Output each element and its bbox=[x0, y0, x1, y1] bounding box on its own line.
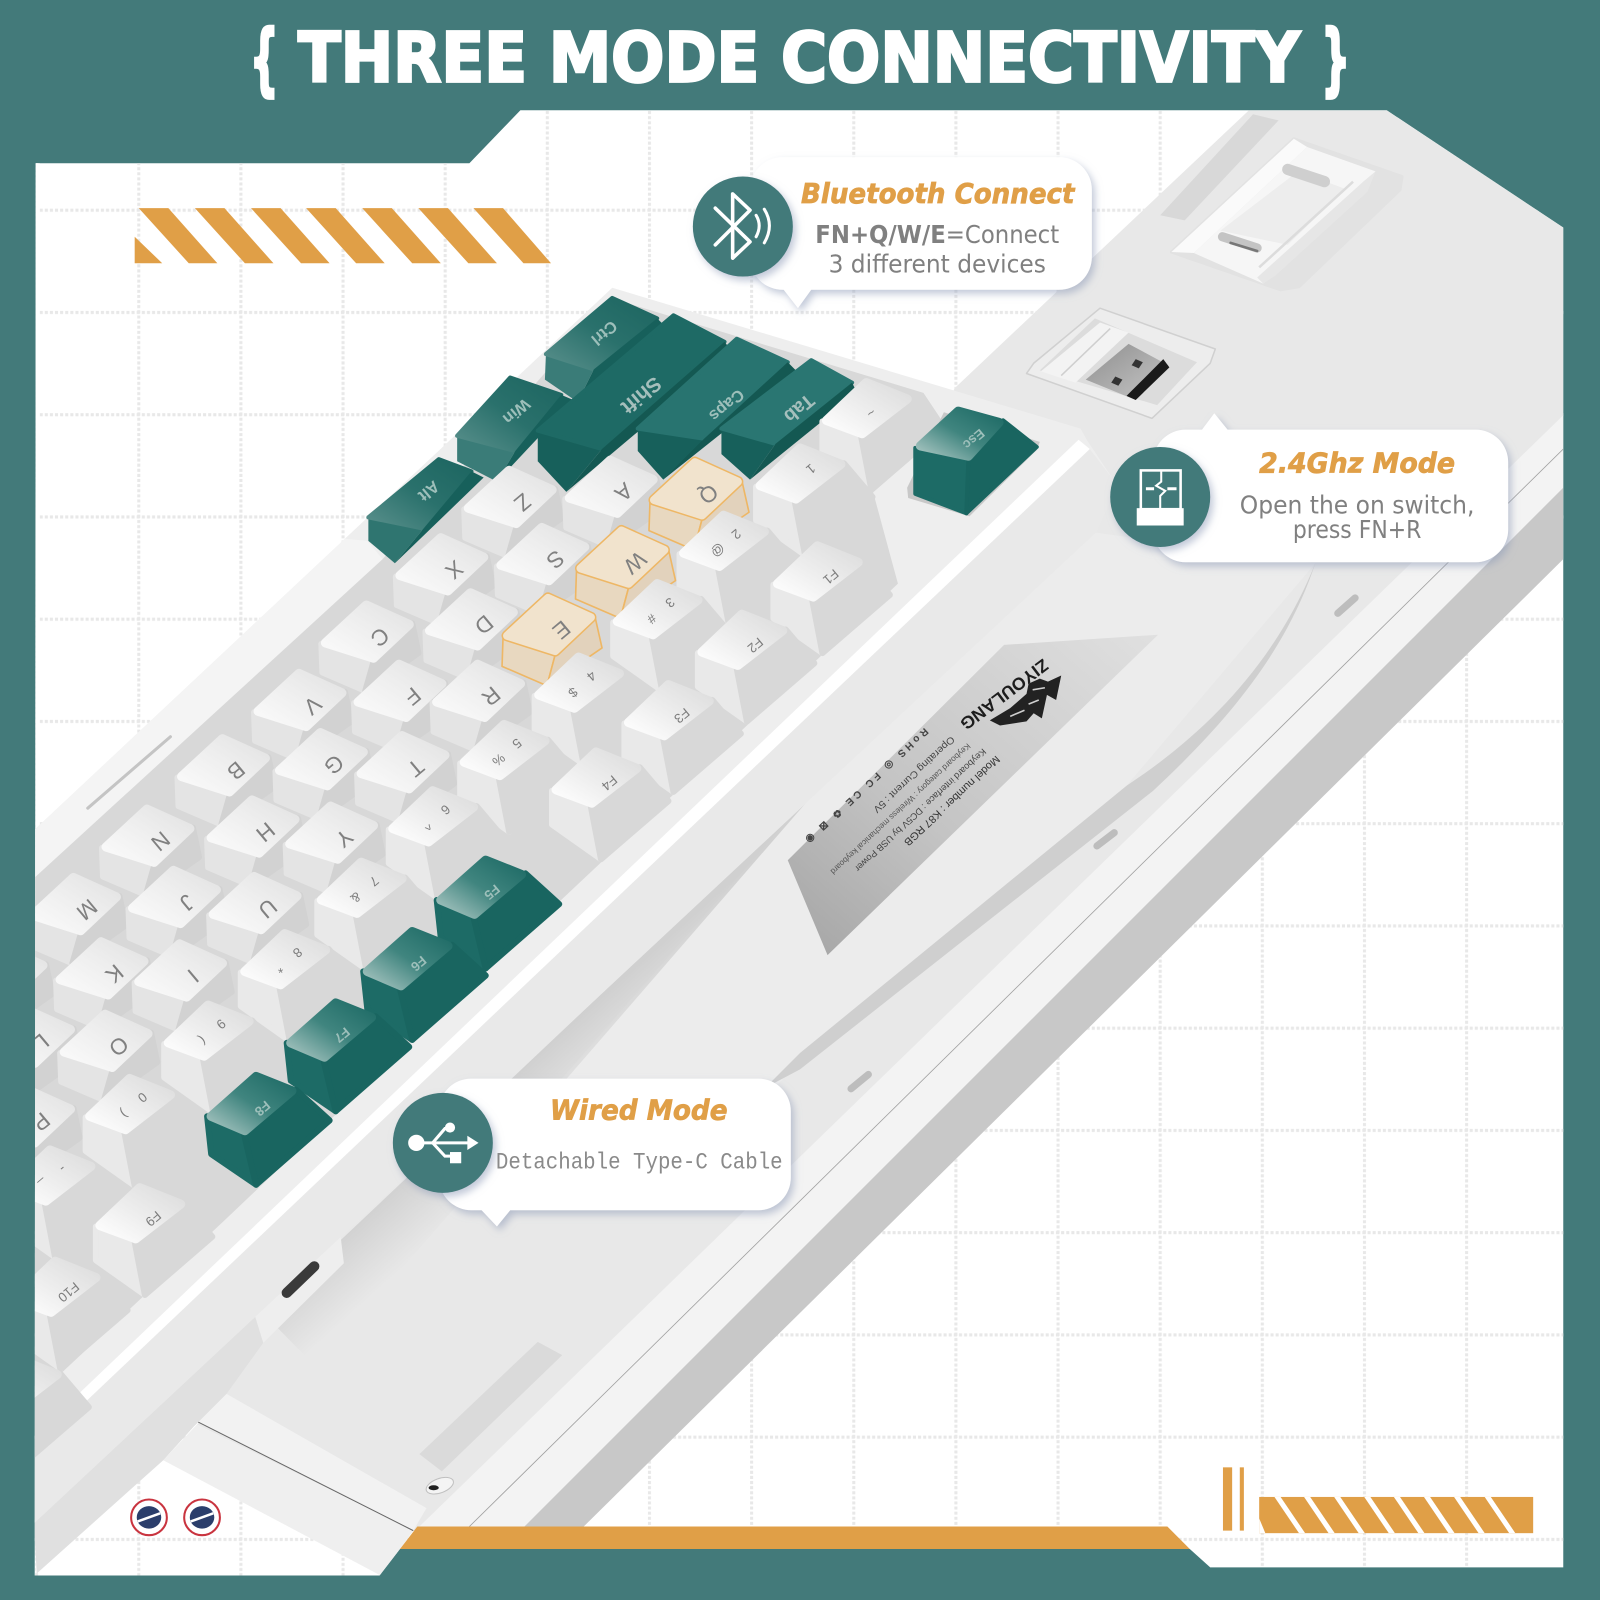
label sticker: Keyboard category : Wireless mechanical keyboard bbox=[828, 741, 972, 876]
bottom-right orange bars bbox=[1223, 1467, 1244, 1531]
keycap: 2: 2 bbox=[729, 526, 744, 542]
keycap: C bbox=[321, 605, 418, 691]
icon: usb dongle bbox=[1110, 447, 1210, 547]
keycap: H: H bbox=[251, 817, 280, 847]
keycap: U: U bbox=[253, 894, 282, 923]
keycap: minus: - bbox=[56, 1162, 69, 1176]
type-C switch bbox=[287, 1266, 314, 1293]
body text: FN+Q/W/E=Connect bbox=[815, 220, 1060, 249]
case side bbox=[34, 1317, 256, 1573]
keycap: E highlighted: E bbox=[548, 615, 575, 644]
keycap: K bbox=[56, 942, 153, 1028]
keycap: C: C bbox=[366, 622, 394, 652]
keycap: A bbox=[565, 460, 662, 546]
keycap: A: A bbox=[610, 478, 637, 507]
sticker spec lines: Model number : K87 RGB bbox=[901, 753, 1002, 848]
keycap: F10 bbox=[11, 1261, 128, 1368]
callout: Wired Mode bbox=[393, 1079, 791, 1227]
keycap: D bbox=[426, 593, 522, 679]
keycap: 1 bbox=[756, 448, 872, 555]
keycap: minus: _ bbox=[36, 1176, 53, 1194]
keycap: Win bbox=[457, 378, 573, 482]
keycap: F3: F3 bbox=[671, 705, 693, 726]
keycap: 8 bbox=[241, 934, 357, 1041]
keycap: Alt: Alt bbox=[414, 477, 443, 505]
keycap: 0 bbox=[86, 1079, 202, 1186]
keycap: F1: F1 bbox=[820, 566, 842, 588]
keycap: F3 bbox=[624, 685, 741, 792]
keycap: 6: 6 bbox=[438, 802, 453, 818]
keycap: 2 bbox=[680, 515, 796, 622]
keycap: J: J bbox=[175, 889, 199, 915]
keycap: Esc: Esc bbox=[960, 426, 988, 452]
heading: Wired Mode bbox=[550, 1094, 728, 1126]
keycap: Z bbox=[464, 470, 561, 556]
keycap: X bbox=[396, 538, 493, 623]
port notch bbox=[255, 1230, 344, 1343]
icon: bluetooth bbox=[693, 177, 793, 277]
keycap: 5: % bbox=[489, 750, 508, 769]
keycap: 6: ^ bbox=[419, 818, 434, 834]
callout: Bluetooth Connect bbox=[693, 157, 1092, 308]
keycap: H bbox=[207, 800, 304, 886]
body text: Detachable Type-C Cable bbox=[496, 1149, 783, 1176]
rubber strip bottom bbox=[419, 1342, 562, 1471]
label sticker bbox=[788, 635, 1158, 955]
keycap: F bbox=[354, 664, 451, 750]
keycap: B bbox=[178, 739, 274, 824]
keycap: W highlighted bbox=[576, 531, 676, 618]
keycap: D: D bbox=[470, 610, 498, 640]
keycap: 8: 8 bbox=[290, 944, 305, 961]
keycap: 7: & bbox=[347, 889, 364, 906]
title: } bbox=[1321, 15, 1350, 105]
callout: 2.4Ghz Mode bbox=[1110, 413, 1508, 562]
keycap: Win: Win bbox=[499, 395, 533, 428]
keycap: F11 bbox=[0, 1358, 89, 1465]
keycap: 9 bbox=[164, 1005, 281, 1112]
Esc recess bbox=[907, 412, 1040, 516]
label sticker: Keyboard interface : DC5V by USB Power bbox=[853, 746, 988, 874]
keycap: Shift bbox=[538, 315, 733, 492]
keycap: I: I bbox=[183, 964, 204, 987]
keycap: G: G bbox=[319, 749, 349, 780]
keycap: Caps bbox=[638, 339, 798, 480]
bubble bbox=[1153, 413, 1508, 562]
keycap: U bbox=[209, 877, 306, 962]
keycap: Shift: Shift bbox=[616, 372, 665, 418]
keycap: W highlighted: W bbox=[618, 546, 651, 579]
keycap: M bbox=[29, 878, 126, 963]
keycap: F6: F6 bbox=[408, 953, 429, 974]
keycap: B: B bbox=[222, 756, 250, 785]
keycap: Esc bbox=[915, 411, 1037, 513]
keycap: T bbox=[357, 736, 454, 821]
keycap: L bbox=[0, 1010, 80, 1096]
keycap: I bbox=[135, 944, 232, 1030]
keycap: F10: F10 bbox=[55, 1279, 82, 1305]
keycap: Caps: Caps bbox=[705, 385, 748, 425]
keycap: F8: F8 bbox=[252, 1098, 273, 1119]
keycap: F4 bbox=[552, 752, 668, 859]
keycap: O bbox=[60, 1014, 157, 1100]
keycap: minus bbox=[6, 1150, 122, 1257]
keycap: 7 bbox=[317, 862, 434, 969]
keycap: N: N bbox=[146, 826, 175, 856]
keycap: M: M bbox=[72, 894, 102, 925]
keycap: 4 bbox=[535, 657, 651, 764]
rubber strip top bbox=[1160, 114, 1279, 220]
top-left orange hazard stripes bbox=[135, 208, 551, 263]
keycap: F: F bbox=[399, 682, 426, 710]
body text: Open the on switch, bbox=[1240, 490, 1474, 519]
keycap: 4: $ bbox=[565, 684, 581, 701]
keycap: tilde bbox=[822, 383, 939, 490]
keycap: 9: ( bbox=[196, 1033, 209, 1048]
keycap: P bbox=[0, 1090, 80, 1176]
keycap: Ctrl bbox=[545, 298, 665, 402]
callout: 2.4Ghz Mode: press FN+R bbox=[1293, 515, 1421, 544]
keycap: 3 bbox=[613, 584, 730, 691]
keycap: 0: ) bbox=[118, 1107, 131, 1121]
keycap: F8 bbox=[207, 1077, 330, 1185]
keycap: 7: 7 bbox=[366, 873, 382, 889]
bottom-right hazard stripe bar bbox=[1259, 1497, 1533, 1533]
keycap: Y: Y bbox=[330, 824, 358, 852]
keycap: R: R bbox=[477, 681, 505, 711]
keycap: P: P bbox=[27, 1107, 55, 1136]
keycap: F7: F7 bbox=[331, 1024, 353, 1046]
keycap: R bbox=[433, 664, 530, 750]
callout: Bluetooth Connect: 3 different devices bbox=[829, 249, 1046, 278]
heading: 2.4Ghz Mode bbox=[1259, 447, 1455, 479]
keycap: 4: 4 bbox=[584, 668, 599, 684]
keycap: 5: 5 bbox=[509, 735, 525, 752]
key well bbox=[35, 298, 944, 1398]
keycap: F9 bbox=[96, 1188, 212, 1295]
keycap: L: L bbox=[28, 1029, 54, 1056]
icon: usb bbox=[393, 1093, 493, 1193]
keycap: 3: # bbox=[644, 611, 659, 627]
keycap: F1 bbox=[773, 546, 890, 653]
bubble bbox=[750, 157, 1092, 308]
keyboard case bbox=[34, 288, 1113, 1523]
sticker brand: ZIYOULANG bbox=[957, 655, 1052, 734]
keycap: K: K bbox=[101, 959, 128, 988]
keycap: F5: F5 bbox=[481, 881, 503, 903]
keycap: F9: F9 bbox=[143, 1208, 164, 1229]
keycap: 6 bbox=[389, 791, 505, 898]
keycap: Z: Z bbox=[509, 488, 536, 516]
keycap: Y bbox=[286, 806, 383, 892]
bubble bbox=[439, 1079, 791, 1227]
keycap: Q highlighted: Q bbox=[694, 479, 723, 509]
keycap: T: T bbox=[402, 754, 429, 782]
title: THREE MODE CONNECTIVITY bbox=[298, 20, 1301, 99]
keycap: N bbox=[102, 809, 199, 895]
tilt foot bbox=[1172, 139, 1375, 283]
keycap: V: V bbox=[299, 691, 326, 720]
title: { bbox=[250, 15, 279, 105]
keycap: V bbox=[254, 673, 351, 759]
wolf logo bbox=[990, 676, 1061, 726]
keycap: 3: 3 bbox=[662, 594, 678, 611]
bottom orange bar bbox=[400, 1527, 1190, 1549]
keycap: tilde: ~ bbox=[863, 405, 879, 421]
keycap: comma bbox=[35, 957, 48, 1006]
label sticker: Operating Current : 5V bbox=[870, 734, 956, 815]
USB receiver slot bbox=[1027, 308, 1215, 418]
keycap: Tab bbox=[721, 360, 857, 480]
icon: round marks bbox=[131, 1499, 220, 1535]
keycap: Tab: Tab bbox=[779, 389, 819, 427]
keycap: J bbox=[129, 870, 226, 956]
keycap: 1: 1 bbox=[803, 461, 818, 477]
keycap: S: S bbox=[542, 545, 569, 574]
keycap: F2 bbox=[698, 614, 814, 721]
keycap: equals bbox=[0, 1219, 48, 1327]
screw hole bbox=[426, 1476, 454, 1494]
certification marks: RoHS ◎ FC CE ♻ ⊠ ◉ bbox=[803, 725, 930, 845]
keycap: 8: * bbox=[272, 962, 286, 976]
keycap: 2: @ bbox=[708, 540, 728, 561]
keycap: G bbox=[276, 733, 372, 818]
keycap: F7 bbox=[287, 1003, 409, 1111]
keycap: F5 bbox=[437, 860, 559, 968]
keycap: 9: 9 bbox=[213, 1016, 229, 1032]
keycap: 5 bbox=[460, 724, 577, 832]
keycap: S bbox=[497, 528, 594, 613]
keycap: O: O bbox=[104, 1031, 133, 1061]
keycap: Ctrl: Ctrl bbox=[587, 317, 621, 348]
keycap: E highlighted bbox=[502, 598, 602, 686]
keycap: F4: F4 bbox=[599, 772, 620, 794]
feet pills bbox=[851, 598, 1355, 1089]
keycap: Q highlighted bbox=[649, 462, 749, 550]
keycap: F6 bbox=[363, 932, 486, 1040]
keycap: F2: F2 bbox=[745, 635, 766, 656]
keycap: X: X bbox=[441, 555, 468, 584]
keycap: 0: 0 bbox=[135, 1089, 150, 1106]
heading: Bluetooth Connect bbox=[801, 178, 1076, 210]
keycap: Alt bbox=[368, 459, 484, 563]
